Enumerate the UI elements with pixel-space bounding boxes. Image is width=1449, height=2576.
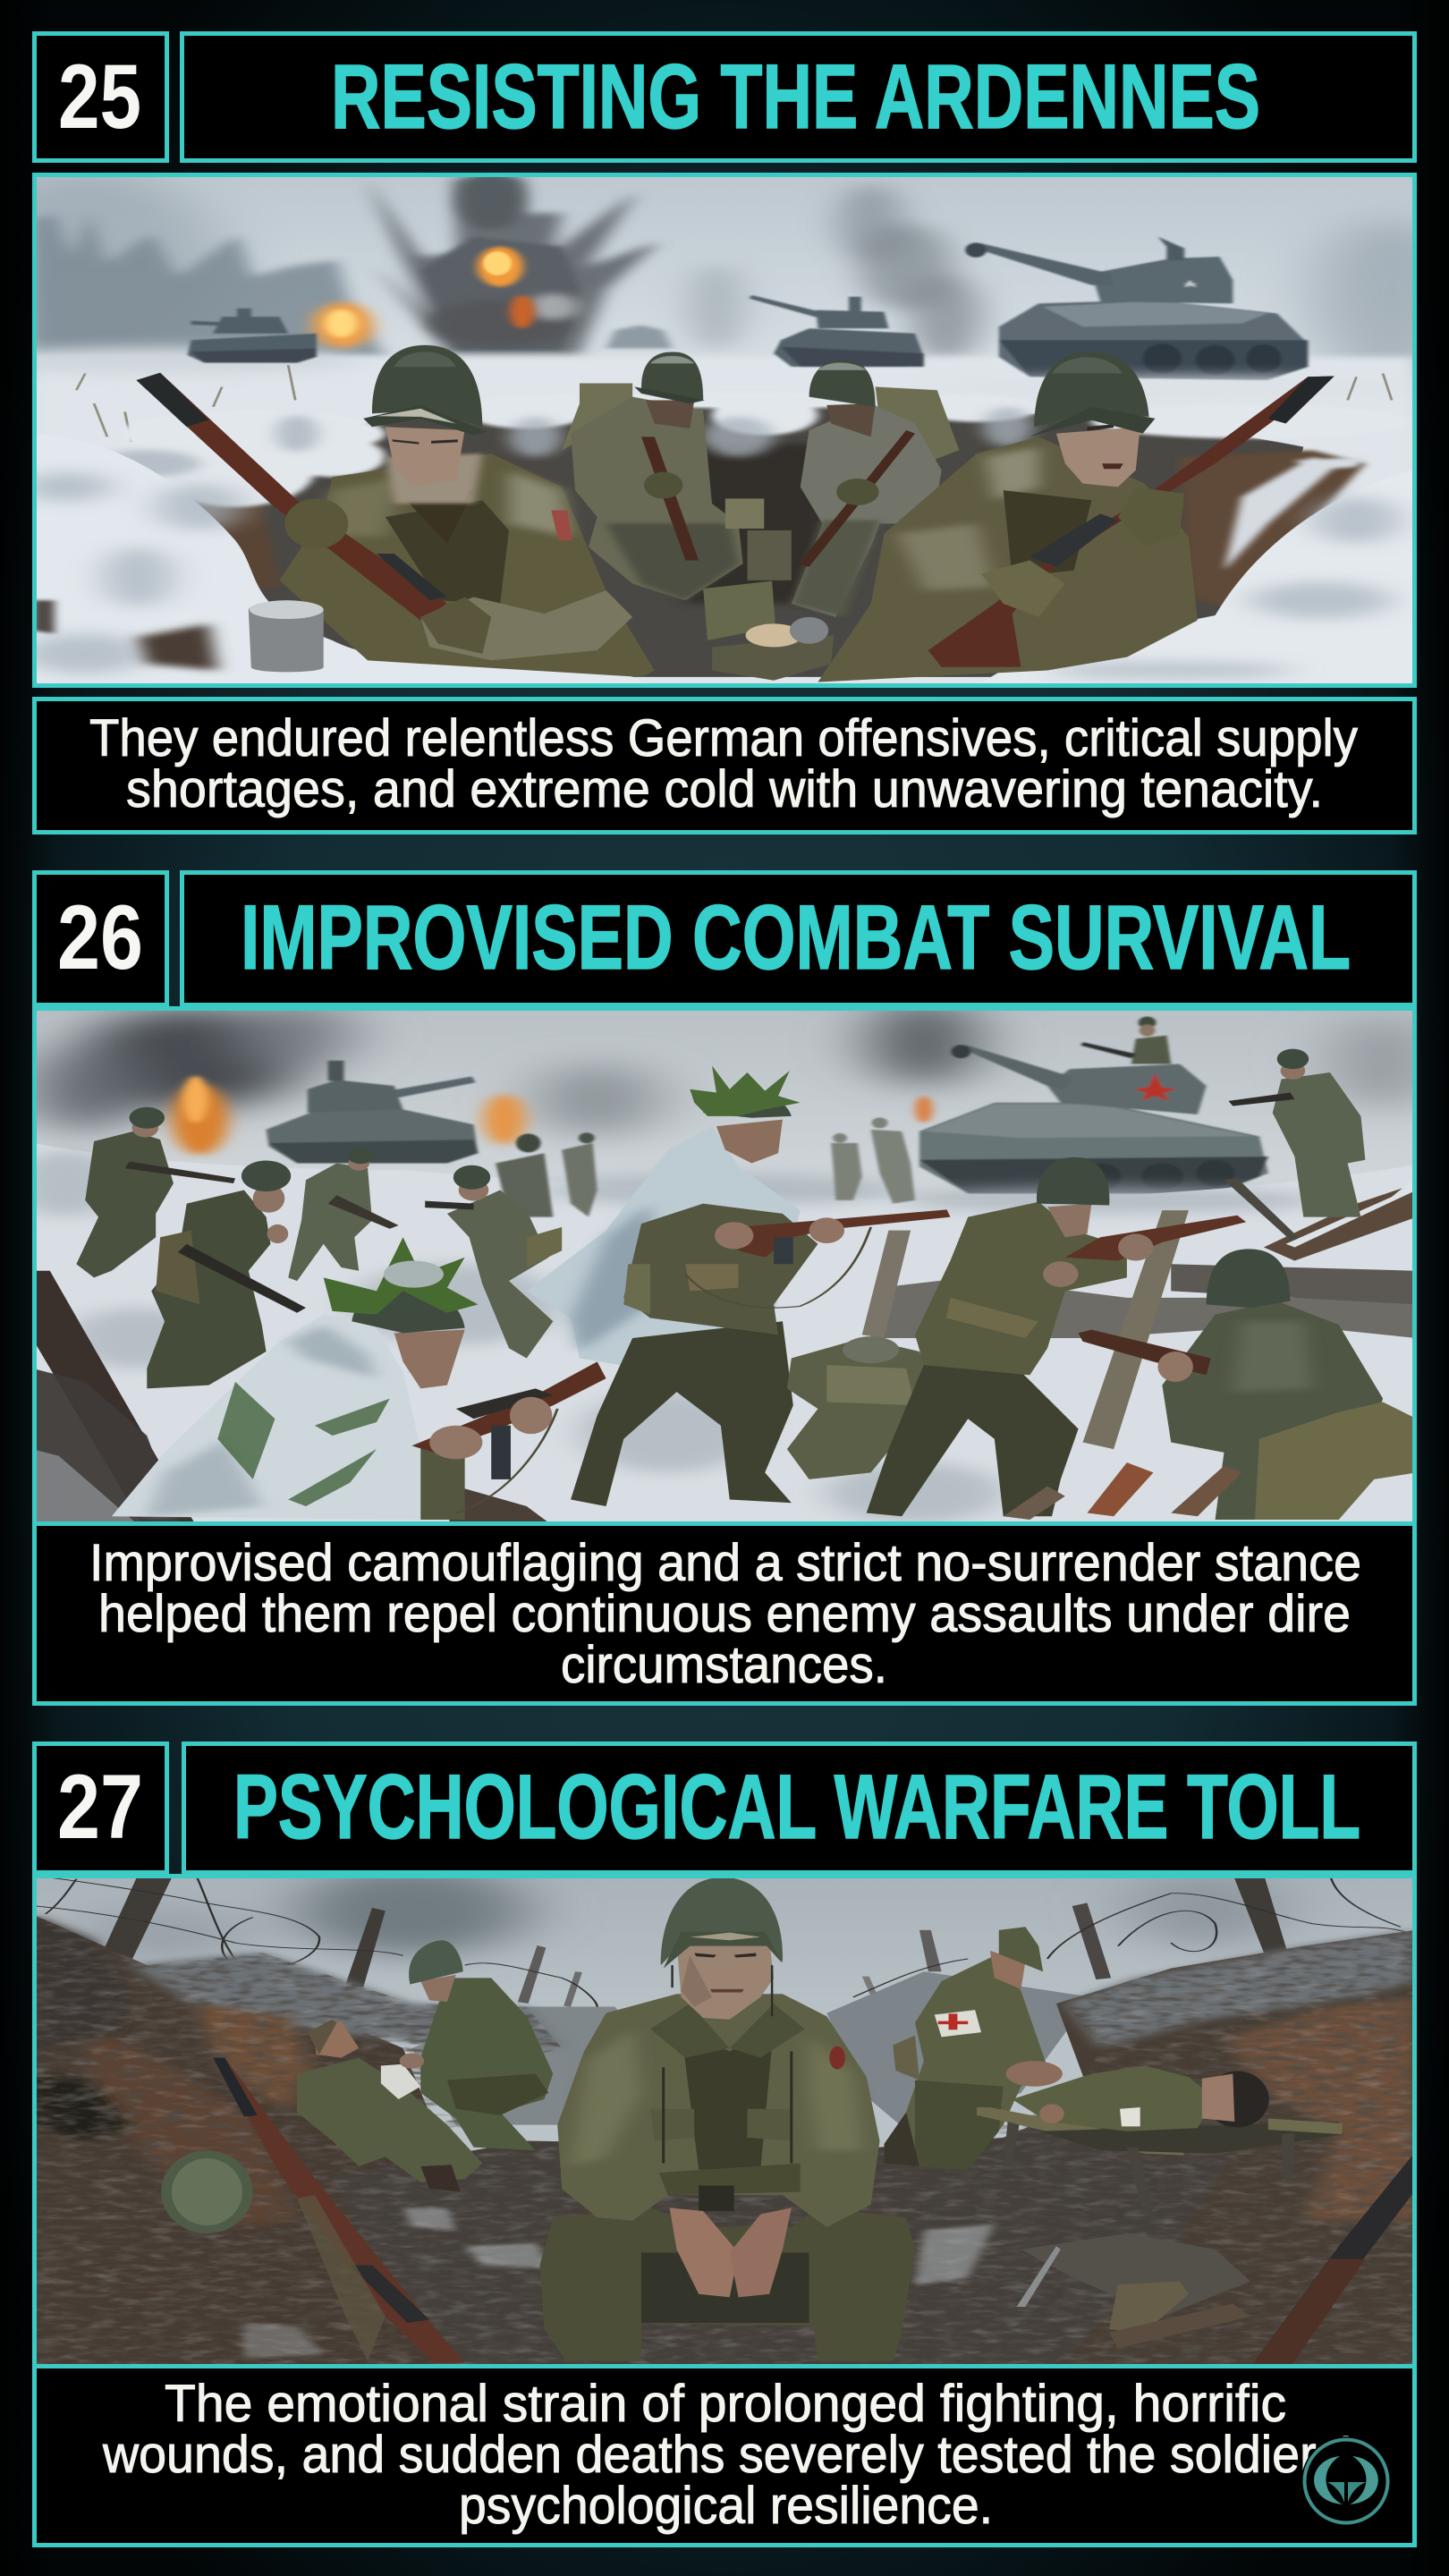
wreckage [32,1271,1241,1532]
smoke columns [688,183,981,360]
illustration: snowy trench with soldiers and tanks [0,170,1449,700]
number box 26: 26 [57,886,143,988]
snow ground [32,357,1417,700]
snow ground [32,1143,1425,1532]
middle tank [749,295,924,367]
caption: section 26: helped them repel continuous enemy assaults under dire [98,1585,1351,1643]
pine camouflage [690,1065,801,1116]
illustration: muddy trench with exhausted soldier and medics [32,1866,1417,2374]
icon: logo badge [1301,2436,1391,2526]
right tank [965,237,1308,380]
caption: section 27 [34,2367,1415,2546]
smoke [32,998,1436,1136]
caption: section 25: They endured relentless German offensives, critical supply [89,709,1358,767]
panel: section 25 [0,34,1449,832]
forest [32,213,386,357]
front right soldier [818,352,1335,682]
caption: section 25 [34,699,1415,832]
water can [249,600,324,672]
distant fire [313,302,373,348]
caption: section 26 [34,1524,1415,1703]
caption: section 27: wounds, and sudden deaths severely tested the soldiers' [102,2426,1351,2484]
soldier aiming in the middle [425,1165,562,1359]
caption: section 26: circumstances. [561,1636,887,1694]
number box 25 [34,34,166,161]
trench floor [333,2099,1250,2373]
caption: section 25: shortages, and extreme cold with unwavering tenacity. [126,760,1323,818]
soldier with satchel [147,1160,306,1388]
running soldier right [867,1157,1246,1516]
heading: Resisting the Ardennes [182,34,1415,161]
trench far wall and mist [411,2007,650,2125]
number box 27 [34,1744,166,1873]
back left soldier [562,352,743,600]
caption: section 27: The emotional strain of prolonged fighting, horrific [165,2375,1286,2433]
foreground snow banks [32,434,659,697]
number box 27: 27 [57,1756,143,1858]
back right soldier [792,360,959,617]
fence posts [101,1874,1288,2007]
number box 26 [34,873,166,1005]
white-caped soldier in foreground [112,1237,606,1520]
trench [208,406,1303,677]
right tank [919,1017,1268,1193]
wounded on stretcher [977,2066,1343,2215]
barbed wire [37,1874,1410,2007]
right background soldier [1228,1049,1365,1217]
caped soldier [527,1065,950,1506]
caption: section 26: Improvised camouflaging and a strict no-surrender stance [89,1534,1361,1592]
soldier at far upper left [76,1107,235,1277]
leaning rifle [213,2058,465,2363]
distant pale soldiers [496,1117,915,1217]
central seated soldier [540,1877,915,2361]
left tank [188,309,317,363]
left medic and wounded soldier [297,1940,553,2192]
mud texture [32,1911,1417,2374]
fire [172,1076,933,1155]
grass tufts [76,365,1392,442]
soldier running left [288,1148,399,1281]
canteen [161,2150,253,2233]
fallen soldier [787,1336,933,1479]
left tank [267,1061,478,1163]
right mud bank [880,1930,1417,2373]
left mud bank [32,1914,571,2373]
number box 25: 25 [58,46,141,148]
caption: section 27: psychological resilience. [459,2477,993,2535]
wooden barricade [862,1177,1417,1449]
panel: section 27 [32,1744,1417,2546]
panel: section 26 [14,873,1436,1703]
far right soldier with pack [1079,1249,1417,1520]
front left soldier [136,345,655,677]
illustration: soldiers repelling assault in snow [14,998,1436,1532]
right foreground debris and rifle [1017,2150,1417,2373]
supplies: jerrycan and crate [703,498,834,681]
right medic [884,1927,1063,2170]
explosion [366,170,659,353]
